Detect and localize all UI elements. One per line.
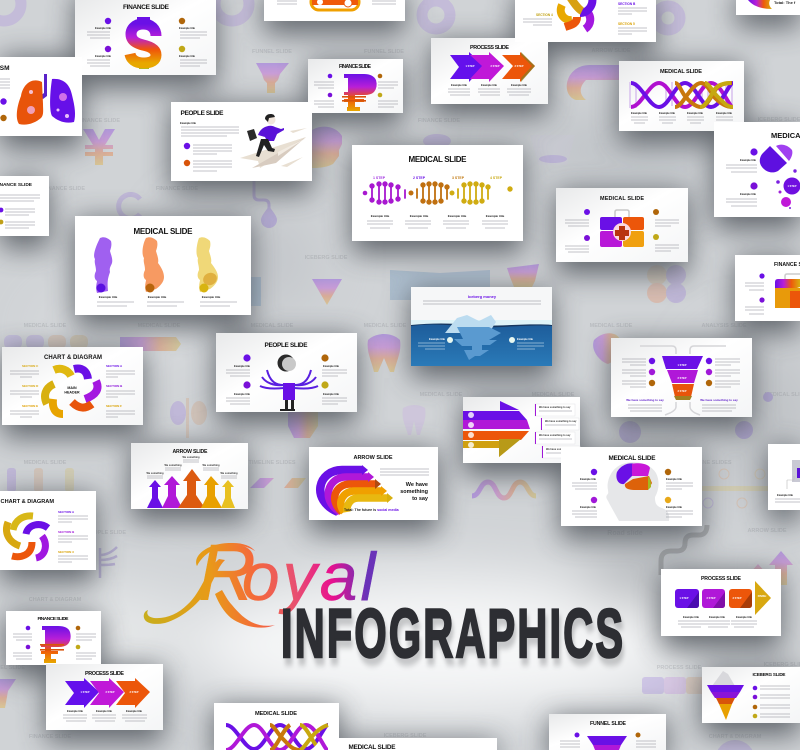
ghost: slide labels: ICEBERG SLIDE — [384, 733, 427, 739]
head silhouette — [606, 462, 669, 521]
card text: We have something to say — [539, 406, 571, 409]
slide: medical bottom — [339, 738, 497, 750]
center label: MAIN — [67, 386, 77, 390]
swoosh — [748, 0, 772, 9]
bullets — [0, 79, 10, 121]
bullets and text: Example title — [740, 192, 757, 196]
bubbles: 1 STEP — [788, 184, 797, 188]
heading: MEDICAL SLIDE — [660, 69, 702, 75]
section texts: SECTION C — [22, 364, 39, 368]
ghost: slide labels: MEDICAL SLIDE — [24, 323, 67, 329]
brain — [616, 463, 652, 490]
text cards — [535, 404, 580, 458]
slide: funnel bottom — [549, 714, 666, 750]
heading: FINANCE SLIDE — [339, 64, 372, 70]
callouts: Example title — [517, 337, 534, 341]
silhouette orange — [143, 237, 164, 292]
step blocks: 2 STEP — [707, 596, 716, 600]
step labels: 3 STEP — [452, 176, 465, 180]
ghost: slide labels: TIMELINE SLIDES — [684, 460, 732, 466]
slide: process step blocks — [661, 569, 781, 636]
slide: chart and diagram — [2, 347, 143, 425]
ghost: arrows — [750, 551, 793, 585]
body lines — [0, 195, 40, 228]
bullets and text: Example title — [580, 477, 597, 481]
dollar sign chart — [130, 17, 156, 69]
card text — [539, 406, 578, 453]
card accents — [535, 404, 543, 458]
ghost: timeline arrows — [250, 478, 306, 488]
heading: Iceberg money — [468, 294, 497, 299]
ghost: flower — [647, 265, 686, 303]
binocular icon — [311, 0, 359, 10]
bullets and text: Example title — [234, 364, 251, 368]
process arrows — [65, 678, 150, 708]
section texts: SECTION B — [58, 530, 75, 534]
ghost: slide labels: PEOPLE SLIDE — [86, 530, 126, 536]
funnel: 1 STEP — [678, 363, 687, 367]
notes: We something — [220, 472, 238, 475]
bullets and text — [87, 18, 207, 66]
step labels: 4 STEP — [490, 176, 503, 180]
bottom notes — [626, 398, 738, 411]
heading: FINANCE SLIDE — [123, 4, 170, 11]
circular arrows — [45, 368, 98, 414]
process arrows: 2 STEP — [106, 690, 115, 694]
captions — [678, 615, 757, 627]
captions: Example title — [410, 214, 429, 218]
side message: to say — [412, 496, 429, 502]
ghost: slide labels: ICEBERG SLIDE — [305, 255, 348, 261]
captions: Example title — [687, 111, 704, 115]
center label: HEADER — [64, 390, 80, 394]
text block — [180, 121, 239, 171]
bullets and text — [13, 626, 96, 659]
ghost: slide labels: FINANCE SLIDE — [43, 186, 85, 192]
pipes — [640, 346, 726, 415]
wordmark shadow: INFOGRAPHICS — [283, 602, 625, 680]
ghost: donuts — [0, 0, 680, 30]
section texts — [10, 364, 135, 417]
ghost: brain — [593, 333, 620, 364]
ghost: process bar — [120, 337, 181, 351]
slide: chart and diagram left — [0, 491, 96, 570]
captions: Example title — [481, 83, 498, 87]
slide: top cropped — [264, 0, 405, 21]
ghost: slide labels: MEDICAL SLIDE — [532, 392, 575, 398]
DNA dots strand — [363, 182, 512, 204]
slide: arrow rainbow — [309, 447, 438, 520]
heading: PROCESS SLIDE — [470, 45, 509, 51]
section texts: SECTION E — [22, 404, 38, 408]
ghost: process blocks — [642, 677, 708, 694]
captions — [367, 214, 508, 228]
captions: Example title — [736, 615, 753, 619]
intro text — [423, 301, 541, 304]
ghost: silhouettes row — [7, 468, 74, 492]
heading: MEDICAL SLIDE — [255, 711, 297, 717]
heading: PROCESS SLIDE — [85, 671, 124, 677]
process arrows — [450, 52, 535, 82]
up arrows — [147, 469, 235, 508]
bullets and text — [560, 732, 656, 747]
ghost: funnels — [256, 63, 539, 287]
captions: Example title — [148, 295, 167, 299]
bullets and text: Example title — [740, 158, 757, 162]
step blocks — [675, 581, 771, 615]
captions: Example title — [716, 111, 733, 115]
bullets and text — [314, 74, 398, 107]
ghost: people figure — [100, 547, 117, 578]
slide: funnel — [611, 338, 752, 417]
process arrows: 1 STEP — [81, 690, 90, 694]
heading: ICEBERG SLIDE — [752, 672, 786, 677]
ghost: slide labels: FINANCE SLIDE — [29, 734, 71, 740]
slide: people arms — [216, 333, 357, 412]
notes: We something — [164, 464, 182, 467]
caption: Total: The f — [774, 0, 796, 5]
side message: something — [400, 489, 428, 495]
ghost: slide labels: MEDICAL SLIDE — [138, 323, 181, 329]
captions: Example title — [511, 83, 528, 87]
slide: medical pill — [714, 122, 800, 217]
section labels: SECTION 5 — [618, 22, 635, 26]
slide: medical kit — [556, 188, 688, 262]
bullets and text — [745, 273, 765, 314]
slide: finance left cropped — [0, 176, 49, 236]
step blocks: 1 STEP — [680, 596, 689, 600]
section labels: SECTION B — [618, 2, 636, 6]
captions: Example title — [448, 214, 467, 218]
iceberg triangle — [707, 671, 744, 720]
heading: CHART & DIAGRAM — [1, 499, 54, 505]
bullets and text — [726, 148, 758, 206]
ghost: slide labels: ARROW SLIDE — [747, 528, 787, 534]
ghost: chart circle — [715, 740, 755, 750]
bullets and text: Example title — [95, 54, 112, 58]
section texts: SECTION A — [106, 364, 123, 368]
bullets and text: Example title — [95, 26, 112, 30]
ghost: layered head — [312, 127, 342, 168]
slide: arrow up — [131, 443, 248, 509]
ghost: slide labels: TIMELINE SLIDES — [248, 460, 296, 466]
ghost: yen — [83, 129, 115, 165]
section texts: SECTION 3 — [58, 550, 74, 554]
iceberg yen — [445, 315, 501, 360]
capsule — [760, 145, 792, 172]
heading: CHART & DIAGRAM — [44, 355, 102, 361]
notes: We something — [202, 464, 220, 467]
silhouette yellow — [196, 237, 218, 292]
DNA helix — [630, 82, 733, 108]
heading: FINANCE SLIDE — [38, 616, 69, 622]
heading: PEOPLE SLIDE — [180, 110, 224, 117]
ghost: iceberg sea panels — [251, 270, 490, 306]
step labels: 1 STEP — [373, 176, 386, 180]
ghost: slide labels: Road slide — [607, 530, 643, 537]
bullets and text: Example title — [179, 26, 196, 30]
slide: iceberg yen — [411, 287, 552, 366]
slide: process bottom left — [46, 664, 163, 730]
funnel — [662, 356, 703, 400]
card text: We have something to say — [545, 420, 577, 423]
slide: arrow list — [463, 397, 580, 463]
notes: We something — [182, 456, 200, 459]
section labels — [523, 2, 647, 34]
captions — [63, 709, 147, 721]
ghost: slide labels: ARROW SLIDE — [591, 48, 631, 54]
section texts — [58, 510, 88, 562]
fetus icon — [201, 271, 219, 287]
captions: Example title — [371, 214, 390, 218]
pinwheel diagram — [561, 0, 592, 29]
slide: iceberg bottom right — [702, 667, 800, 723]
captions: Example title — [202, 295, 221, 299]
heading: MEDICAL SLIDE — [408, 155, 467, 164]
brand wordmark — [144, 528, 625, 680]
process arrows: 2 STEP — [491, 64, 500, 68]
step blocks: FINISH — [758, 594, 766, 598]
slide: finance P bottom — [6, 611, 101, 665]
ghost: slide labels: MEDICAL SLIDE — [364, 323, 407, 329]
ghost: timeline — [702, 469, 768, 508]
ghost: slide labels: ANALYSIS SLIDE — [701, 323, 747, 329]
bullets and text — [753, 686, 790, 718]
callouts: Example title — [429, 337, 446, 341]
ghost: slide labels: FUNNEL SLIDE — [252, 49, 292, 55]
captions: Example title — [96, 709, 113, 713]
ghost: slide labels: FINANCE SLIDE — [156, 186, 198, 192]
ghost: arrow swoosh — [567, 65, 620, 100]
text block: Example title — [180, 121, 197, 125]
ghost: iceberg triangle — [312, 279, 342, 305]
briefcase — [775, 274, 800, 308]
step labels: 2 STEP — [413, 176, 426, 180]
businessman on paper plane — [240, 114, 307, 168]
slide: people plane — [171, 102, 312, 181]
section texts: SECTION A — [58, 510, 75, 514]
captions: Example title — [659, 111, 676, 115]
captions: Example title — [126, 709, 143, 713]
captions: Example title — [709, 615, 726, 619]
wordmark: INFOGRAPHICS: INFOGRAPHICS — [281, 595, 623, 673]
rainbow bands — [320, 470, 387, 512]
heading: MEDICAL SLIDE — [608, 455, 656, 462]
captions — [97, 295, 237, 306]
slide: process top — [431, 38, 548, 104]
heading: ARROW SLIDE — [172, 449, 208, 455]
silhouette purple — [94, 237, 112, 293]
ghost: slide labels: MEDICAL SLIDE — [251, 323, 294, 329]
card text: We have something to say — [539, 434, 571, 437]
ghost: viruses — [619, 392, 773, 443]
slide: brain — [561, 447, 702, 526]
notes — [146, 456, 238, 478]
slide: sections top — [515, 0, 656, 42]
number badges — [96, 284, 208, 292]
bullets and text: Example title — [323, 364, 340, 368]
slide: finance S — [75, 0, 216, 75]
ghost: slide labels: CHART & DIAGRAM — [709, 734, 762, 740]
slide: right cropped — [768, 444, 800, 510]
figure with many arms — [260, 354, 318, 411]
ruble sign chart — [342, 74, 377, 111]
mini diagram — [787, 460, 800, 489]
captions: Example title — [486, 214, 505, 218]
ghost: piggy — [423, 134, 451, 148]
caption: Total: The future is social media — [344, 508, 400, 512]
ghost: slide labels: MEDICAL SLIDE — [420, 392, 463, 398]
process arrows: 1 STEP — [466, 64, 475, 68]
ghost: slide labels: MEDICAL SLIDE — [24, 460, 67, 466]
ghost: drop and pipe — [254, 180, 269, 213]
captions: Example title — [67, 709, 84, 713]
script logo: Royal — [144, 528, 379, 628]
ghost: funnel left — [0, 679, 16, 708]
bullets and text: Example title — [580, 505, 597, 509]
bullets and text: Example title — [666, 505, 683, 509]
bottom notes: We have something to say — [626, 398, 664, 402]
ghost: slide labels: FINANCE SLIDE — [78, 118, 120, 124]
process arrows: 3 STEP — [130, 690, 139, 694]
caption: Example title — [777, 493, 794, 497]
bullets and text: Example title — [666, 477, 683, 481]
ghost: tooth 2 — [403, 405, 425, 435]
body lines — [380, 469, 429, 475]
lungs illustration — [17, 74, 75, 125]
slide: top right arrow cropped — [736, 0, 800, 15]
ghost: slide labels: FUNNEL SLIDE — [364, 49, 404, 55]
section texts: SECTION D — [22, 384, 39, 388]
captions — [631, 111, 733, 123]
ghost: slide labels: ICEBERG SLIDE — [758, 117, 800, 123]
ghost: slide labels: FINANCE SLIDE — [418, 118, 460, 124]
DNA helix — [226, 725, 328, 750]
side message — [400, 482, 429, 502]
callouts — [418, 337, 544, 349]
captions: Example title — [683, 615, 700, 619]
ghost: hearts row — [4, 335, 88, 349]
bullets and text: Example title — [179, 54, 196, 58]
slide: medical DNA large — [619, 61, 744, 131]
ghost: cup and bowl — [530, 135, 575, 165]
ghost: wave — [472, 482, 536, 498]
big arrow bands — [463, 401, 530, 457]
ghost: slide labels: MEDICAL SLIDE — [590, 323, 633, 329]
captions: Example title — [631, 111, 648, 115]
funnel: 3 STEP — [678, 389, 687, 393]
bullets and text — [565, 209, 679, 252]
slide: medical pregnancy — [75, 216, 251, 315]
ghost: road — [661, 525, 707, 575]
slide: finance P top — [308, 59, 403, 113]
captions: Example title — [99, 295, 118, 299]
section texts: SECTION B — [106, 384, 123, 388]
ghost: brain cross-section — [288, 412, 318, 438]
arrow heads — [362, 465, 393, 503]
process arrows: 3 STEP — [515, 64, 524, 68]
ruble sign chart — [40, 626, 71, 663]
step labels — [373, 176, 503, 180]
funnel — [587, 736, 627, 750]
heading: MEDICAL SLIDE — [134, 227, 193, 236]
ghost: tooth — [368, 334, 400, 372]
bullets and text: Example title — [323, 392, 340, 396]
slide: finance case — [735, 255, 800, 321]
slide: medical DNA dots — [352, 145, 523, 241]
body lines — [277, 1, 396, 4]
bullets and text — [622, 358, 740, 387]
section labels: SECTION 4 — [536, 13, 553, 17]
first aid kit — [600, 210, 644, 247]
captions — [448, 83, 531, 95]
funnel: 2 STEP — [678, 376, 687, 380]
ghost: slide labels: PROCESS SLIDE — [657, 665, 702, 671]
notes: We something — [146, 472, 164, 475]
card text: We have something to say — [546, 448, 578, 451]
bullets and text — [572, 469, 693, 517]
ghost: slide labels: CHART & DIAGRAM — [29, 597, 82, 603]
heading: FUNNEL SLIDE — [590, 721, 627, 727]
bullets and text: Example title — [234, 392, 251, 396]
bottom notes: We have something to say — [700, 398, 738, 402]
section texts: SECTION F — [106, 404, 122, 408]
heading: ARROW SLIDE — [354, 455, 393, 461]
bullets and text — [226, 354, 347, 404]
heading: PROCESS SLIDE — [701, 576, 742, 582]
ghost: kidneys — [170, 398, 207, 438]
slide: medical DNA bottom — [214, 703, 339, 750]
ghost: euro — [119, 195, 140, 218]
script logo: Royal: Royal — [198, 528, 379, 617]
sea — [411, 323, 552, 366]
captions: Example title — [451, 83, 468, 87]
step blocks: 3 STEP — [733, 596, 742, 600]
heading: MEDICAL SLIDE — [600, 196, 644, 202]
slide: lungs — [0, 57, 82, 136]
pinwheel — [6, 516, 48, 558]
side message: We have — [406, 482, 428, 488]
heading: PEOPLE SLIDE — [264, 342, 308, 349]
